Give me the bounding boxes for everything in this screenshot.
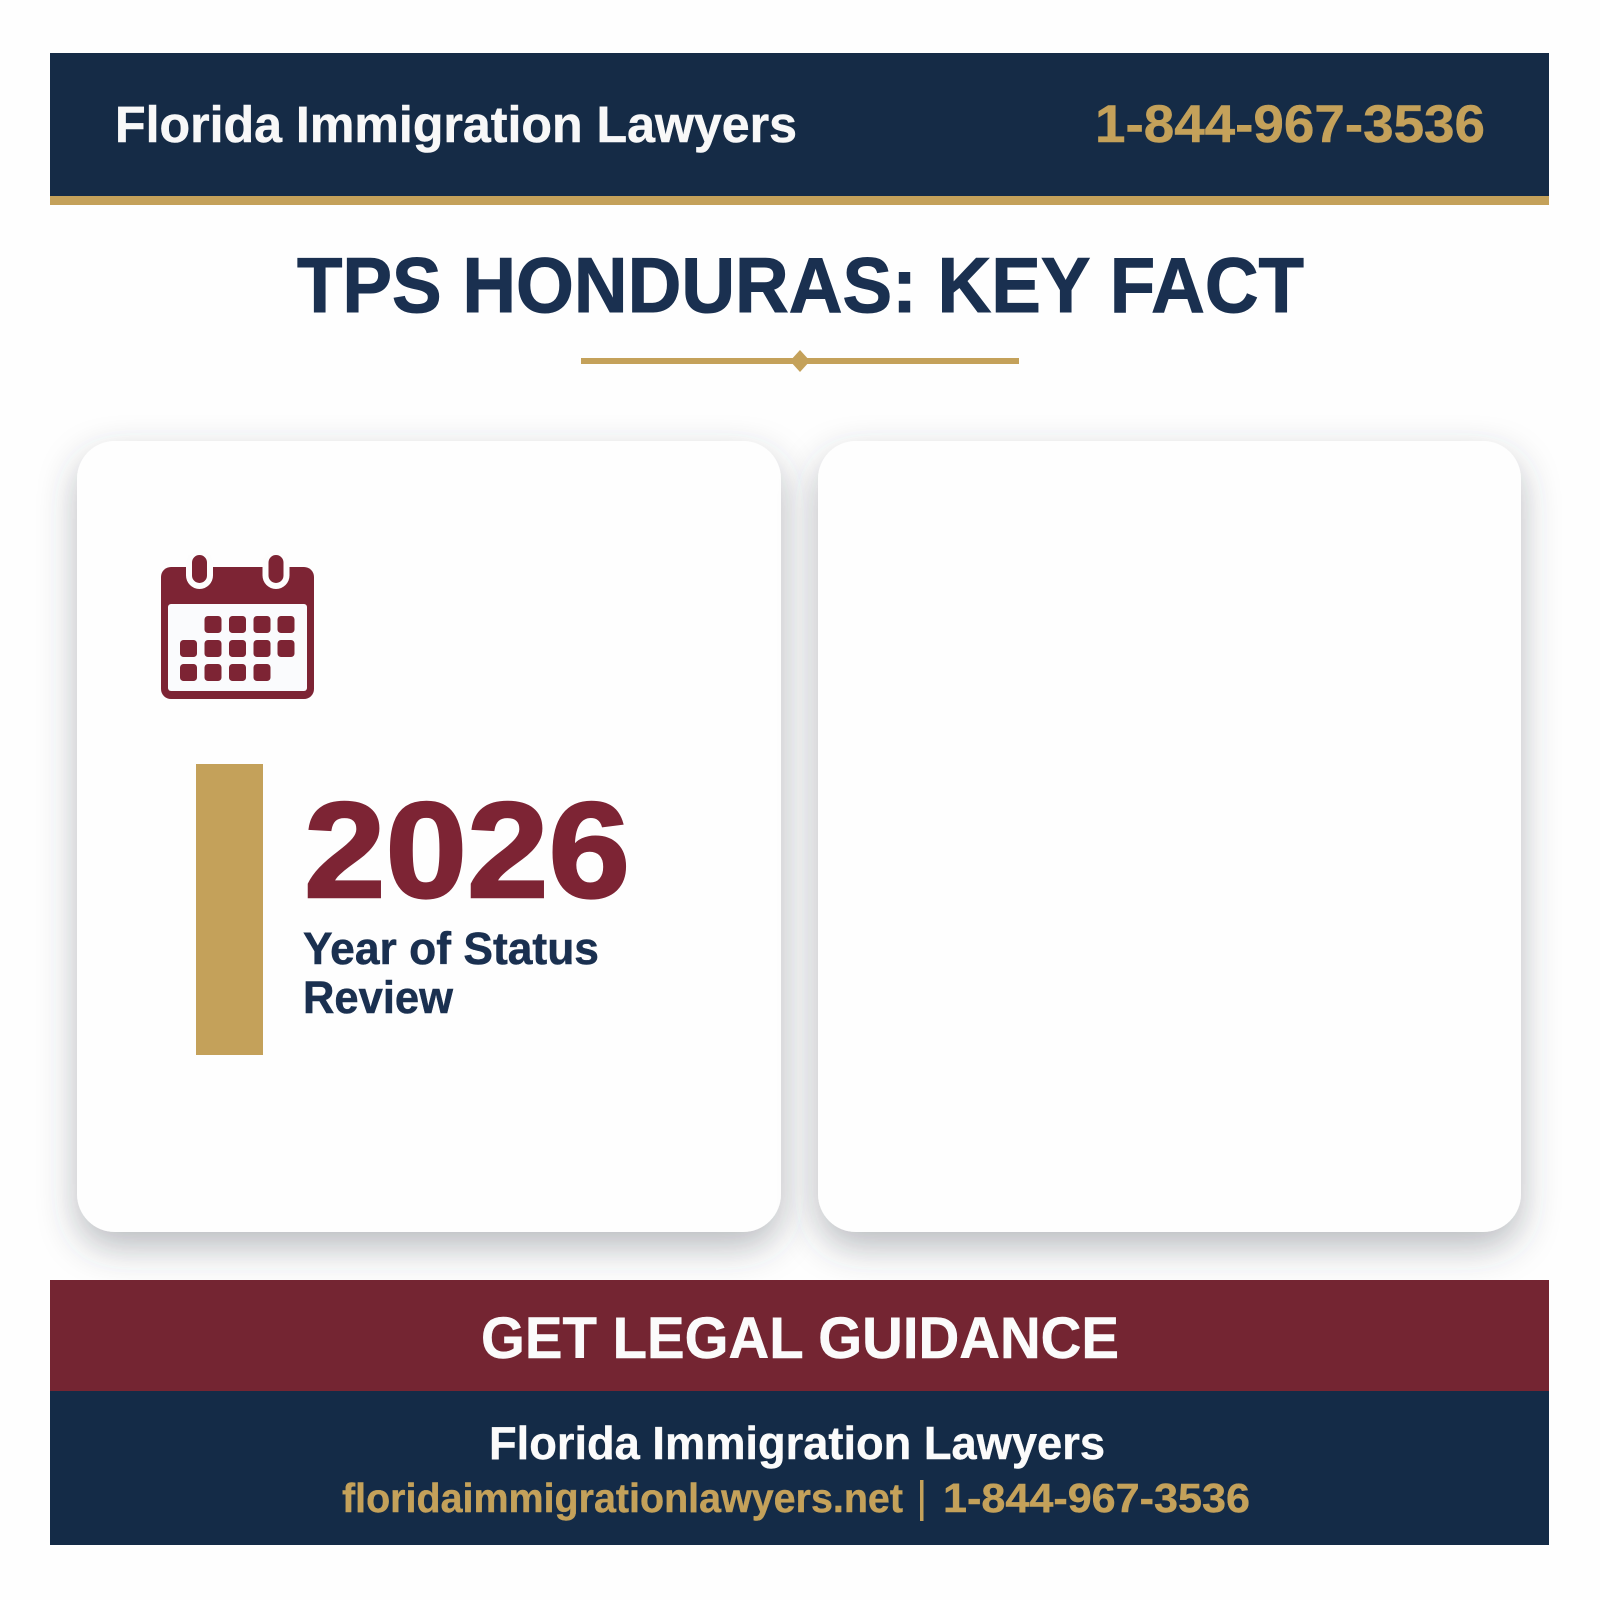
call to action band — [50, 1280, 1549, 1391]
icon: calendar — [161, 550, 314, 699]
firm name: Florida Immigration Lawyers — [115, 96, 797, 153]
gold accent bar — [196, 764, 263, 1055]
header phone number: 1-844-967-3536 — [1095, 95, 1485, 154]
panel: left card — [77, 441, 781, 1232]
footer contact band — [50, 1391, 1549, 1545]
stat label: Year of Status — [303, 923, 599, 974]
panel: right card (empty) — [818, 441, 1521, 1232]
title: TPS HONDURAS: KEY FACT — [297, 241, 1304, 329]
stat label: Review — [303, 972, 454, 1023]
header banner — [50, 53, 1549, 205]
footer website: floridaimmigrationlawyers.net — [342, 1475, 903, 1521]
footer phone number: 1-844-967-3536 — [943, 1475, 1250, 1521]
stat label — [303, 923, 599, 1023]
call to action text: GET LEGAL GUIDANCE — [481, 1306, 1119, 1371]
footer firm name: Florida Immigration Lawyers — [489, 1417, 1105, 1469]
title divider with diamond — [581, 350, 1019, 372]
footer separator — [920, 1480, 924, 1521]
stat: 2026: 2026 — [304, 774, 630, 926]
